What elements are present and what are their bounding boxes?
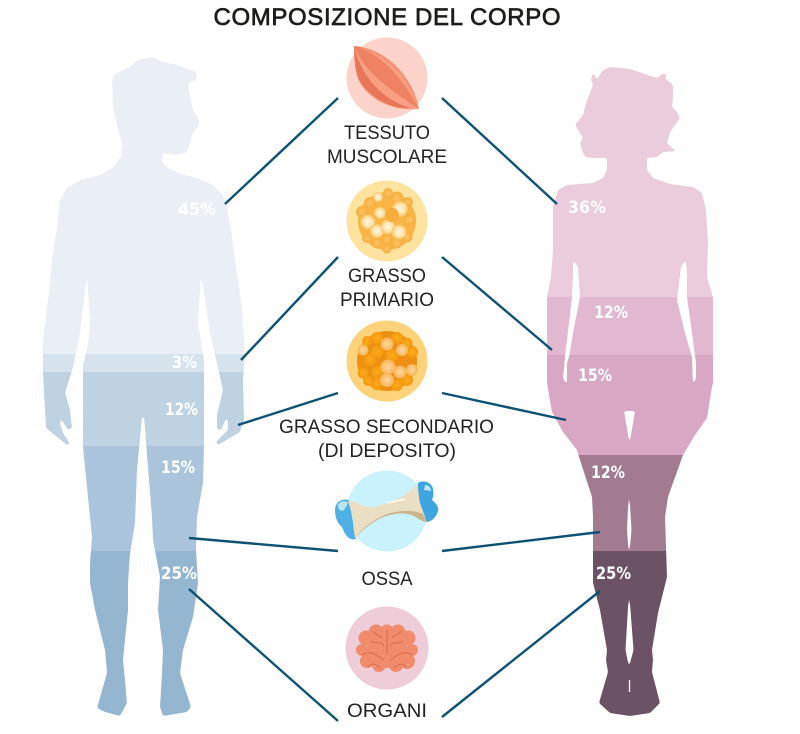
title: COMPOSIZIONE DEL CORPO <box>214 4 560 31</box>
female percentages: 15% <box>578 366 612 386</box>
label: grasso secondario <box>279 417 494 462</box>
female percentages: 25% <box>596 564 631 584</box>
icon: secondary fat <box>346 320 428 402</box>
male percentages: 45% <box>178 200 216 220</box>
label: tessuto muscolare: TESSUTO <box>344 123 430 144</box>
label: ossa: OSSA <box>362 569 413 590</box>
female percentages: 12% <box>594 303 628 323</box>
icon: muscle <box>346 38 428 118</box>
connector lines <box>189 98 600 721</box>
male percentages: 25% <box>161 564 197 584</box>
female percentages: 12% <box>591 463 625 483</box>
icon: bone <box>335 470 438 552</box>
label: grasso primario: PRIMARIO <box>340 290 434 311</box>
label: grasso primario: GRASSO <box>348 266 426 287</box>
icon: brain organ <box>346 606 428 690</box>
label: grasso secondario: GRASSO SECONDARIO <box>279 417 494 438</box>
label: tessuto muscolare <box>327 123 447 168</box>
label: grasso secondario: (DI DEPOSITO) <box>318 441 456 462</box>
female percentages: 36% <box>568 198 606 218</box>
male percentages: 12% <box>165 400 198 420</box>
label: grasso primario <box>340 266 434 311</box>
label: organi: ORGANI <box>347 701 427 722</box>
female percentages <box>568 198 631 584</box>
male percentages: 3% <box>172 353 197 373</box>
male percentages <box>161 200 216 584</box>
label: tessuto muscolare: MUSCOLARE <box>327 147 447 168</box>
female silhouette <box>547 67 713 716</box>
icon: primary fat <box>346 180 428 262</box>
male silhouette <box>43 57 245 716</box>
male percentages: 15% <box>161 458 195 478</box>
